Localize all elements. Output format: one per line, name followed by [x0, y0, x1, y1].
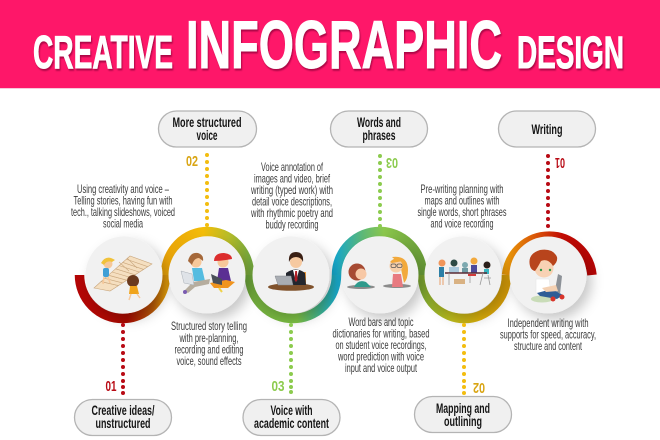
pill: more structured voice	[158, 111, 256, 147]
stage 6 disc with boy on laptop	[510, 236, 586, 314]
step number 01 bottom: 01	[106, 379, 116, 395]
text block: stage 4 description: word prediction with voice	[337, 350, 424, 364]
step number 03 upside down: 03	[386, 154, 398, 170]
pill: creative ideas / unstructured: unstructured	[96, 415, 150, 431]
pill: words and phrases: phrases	[362, 127, 396, 143]
text block: stage 2 description	[171, 319, 247, 368]
title: CREATIVE	[33, 26, 173, 78]
ribbon connecting the six stages	[80, 231, 592, 318]
pill: writing: Writing	[532, 121, 562, 137]
text block: stage 1 description: Using creativity and voice –	[77, 182, 169, 196]
pill: creative ideas / unstructured: Creative ideas/	[92, 402, 155, 418]
text block: stage 6 description	[500, 316, 596, 353]
pill: mapping and outlining: outlining	[444, 413, 482, 429]
dotted connector: stage 4 up	[378, 154, 382, 228]
pill: creative ideas / unstructured	[74, 400, 172, 436]
text block: stage 3 description: images and video, brief	[254, 172, 330, 186]
dotted connector: stage 3 down	[289, 323, 293, 394]
text block: stage 1 description: social media	[103, 216, 143, 230]
text block: stage 5 description: and voice recording	[430, 216, 494, 230]
step number 03 bottom: 03	[272, 379, 284, 395]
stage 3 disc with man at laptop	[252, 236, 330, 314]
text block: stage 4 description: input and voice output	[345, 361, 417, 375]
pill: words and phrases	[330, 111, 428, 147]
text block: stage 3 description: buddy recording	[266, 218, 318, 232]
text block: stage 3 description: detail voice descriptions,	[252, 194, 332, 208]
dotted connector: stage 5 down	[462, 323, 466, 395]
pill: words and phrases: Words and	[357, 114, 401, 130]
text block: stage 6 description: supports for speed, accuracy,	[500, 328, 596, 342]
pill: voice with academic content: academic content	[254, 415, 329, 431]
stage 5 disc with group around a table	[424, 236, 502, 314]
text block: stage 5 description: maps and outlines with	[424, 194, 500, 208]
text block: stage 3 description: Voice annotation of	[261, 160, 323, 174]
text block: stage 6 description: structure and content	[514, 339, 582, 353]
header banner	[0, 0, 660, 89]
text block: stage 2 description: recording and editing	[174, 342, 244, 356]
text block: stage 4 description: on student voice recordings,	[336, 338, 426, 352]
text block: stage 5 description: single words, short phrases	[418, 205, 506, 219]
pill: voice with academic content	[243, 400, 340, 436]
text block: stage 1 description: tech., talking slideshows, voiced	[71, 205, 175, 219]
text block: stage 3 description: with rhythmic poetry and	[250, 206, 333, 220]
dotted connector: stage 6 up	[546, 154, 550, 228]
text block: stage 3 description	[250, 160, 333, 232]
step number 02 upside down: 02	[473, 379, 485, 395]
pill: voice with academic content: Voice with	[270, 402, 312, 418]
pill: more structured voice: voice	[196, 127, 218, 143]
text block: stage 1 description	[71, 182, 175, 230]
text block: stage 2 description: Structured story telling	[171, 319, 247, 333]
text block: stage 6 description: Independent writing with	[508, 316, 588, 330]
text block: stage 2 description: voice, sound effects	[176, 354, 242, 368]
dotted connector: stage 1 down	[121, 323, 125, 395]
text block: stage 3 description: writing (typed work) with	[250, 183, 333, 197]
text block: stage 4 description: dictionaries for writing, based	[332, 326, 430, 340]
dotted connector: stage 2 up	[205, 153, 209, 227]
title: INFOGRAPHIC	[186, 7, 502, 83]
text block: stage 4 description	[332, 315, 430, 375]
step number 02 top: 02	[186, 154, 198, 170]
text block: stage 5 description: Pre-writing planning with	[420, 182, 504, 196]
pill: writing	[498, 111, 596, 147]
pill: more structured voice: More structured	[172, 114, 242, 130]
title	[33, 7, 624, 83]
stage 1 disc with hopscotch illustration	[86, 236, 162, 314]
pill: mapping and outlining	[414, 396, 512, 432]
text block: stage 5 description	[418, 182, 506, 230]
pill: mapping and outlining: Mapping and	[436, 400, 490, 416]
stage 4 disc with two girls	[342, 236, 418, 314]
text block: stage 2 description: with pre-planning,	[179, 331, 238, 345]
step number 01 upside down: 01	[555, 154, 565, 170]
text block: stage 4 description: Word bars and topic	[348, 315, 414, 329]
text block: stage 1 description: Telling stories, having fun with	[74, 194, 172, 208]
stage 2 disc with two children on laptops	[168, 236, 246, 314]
